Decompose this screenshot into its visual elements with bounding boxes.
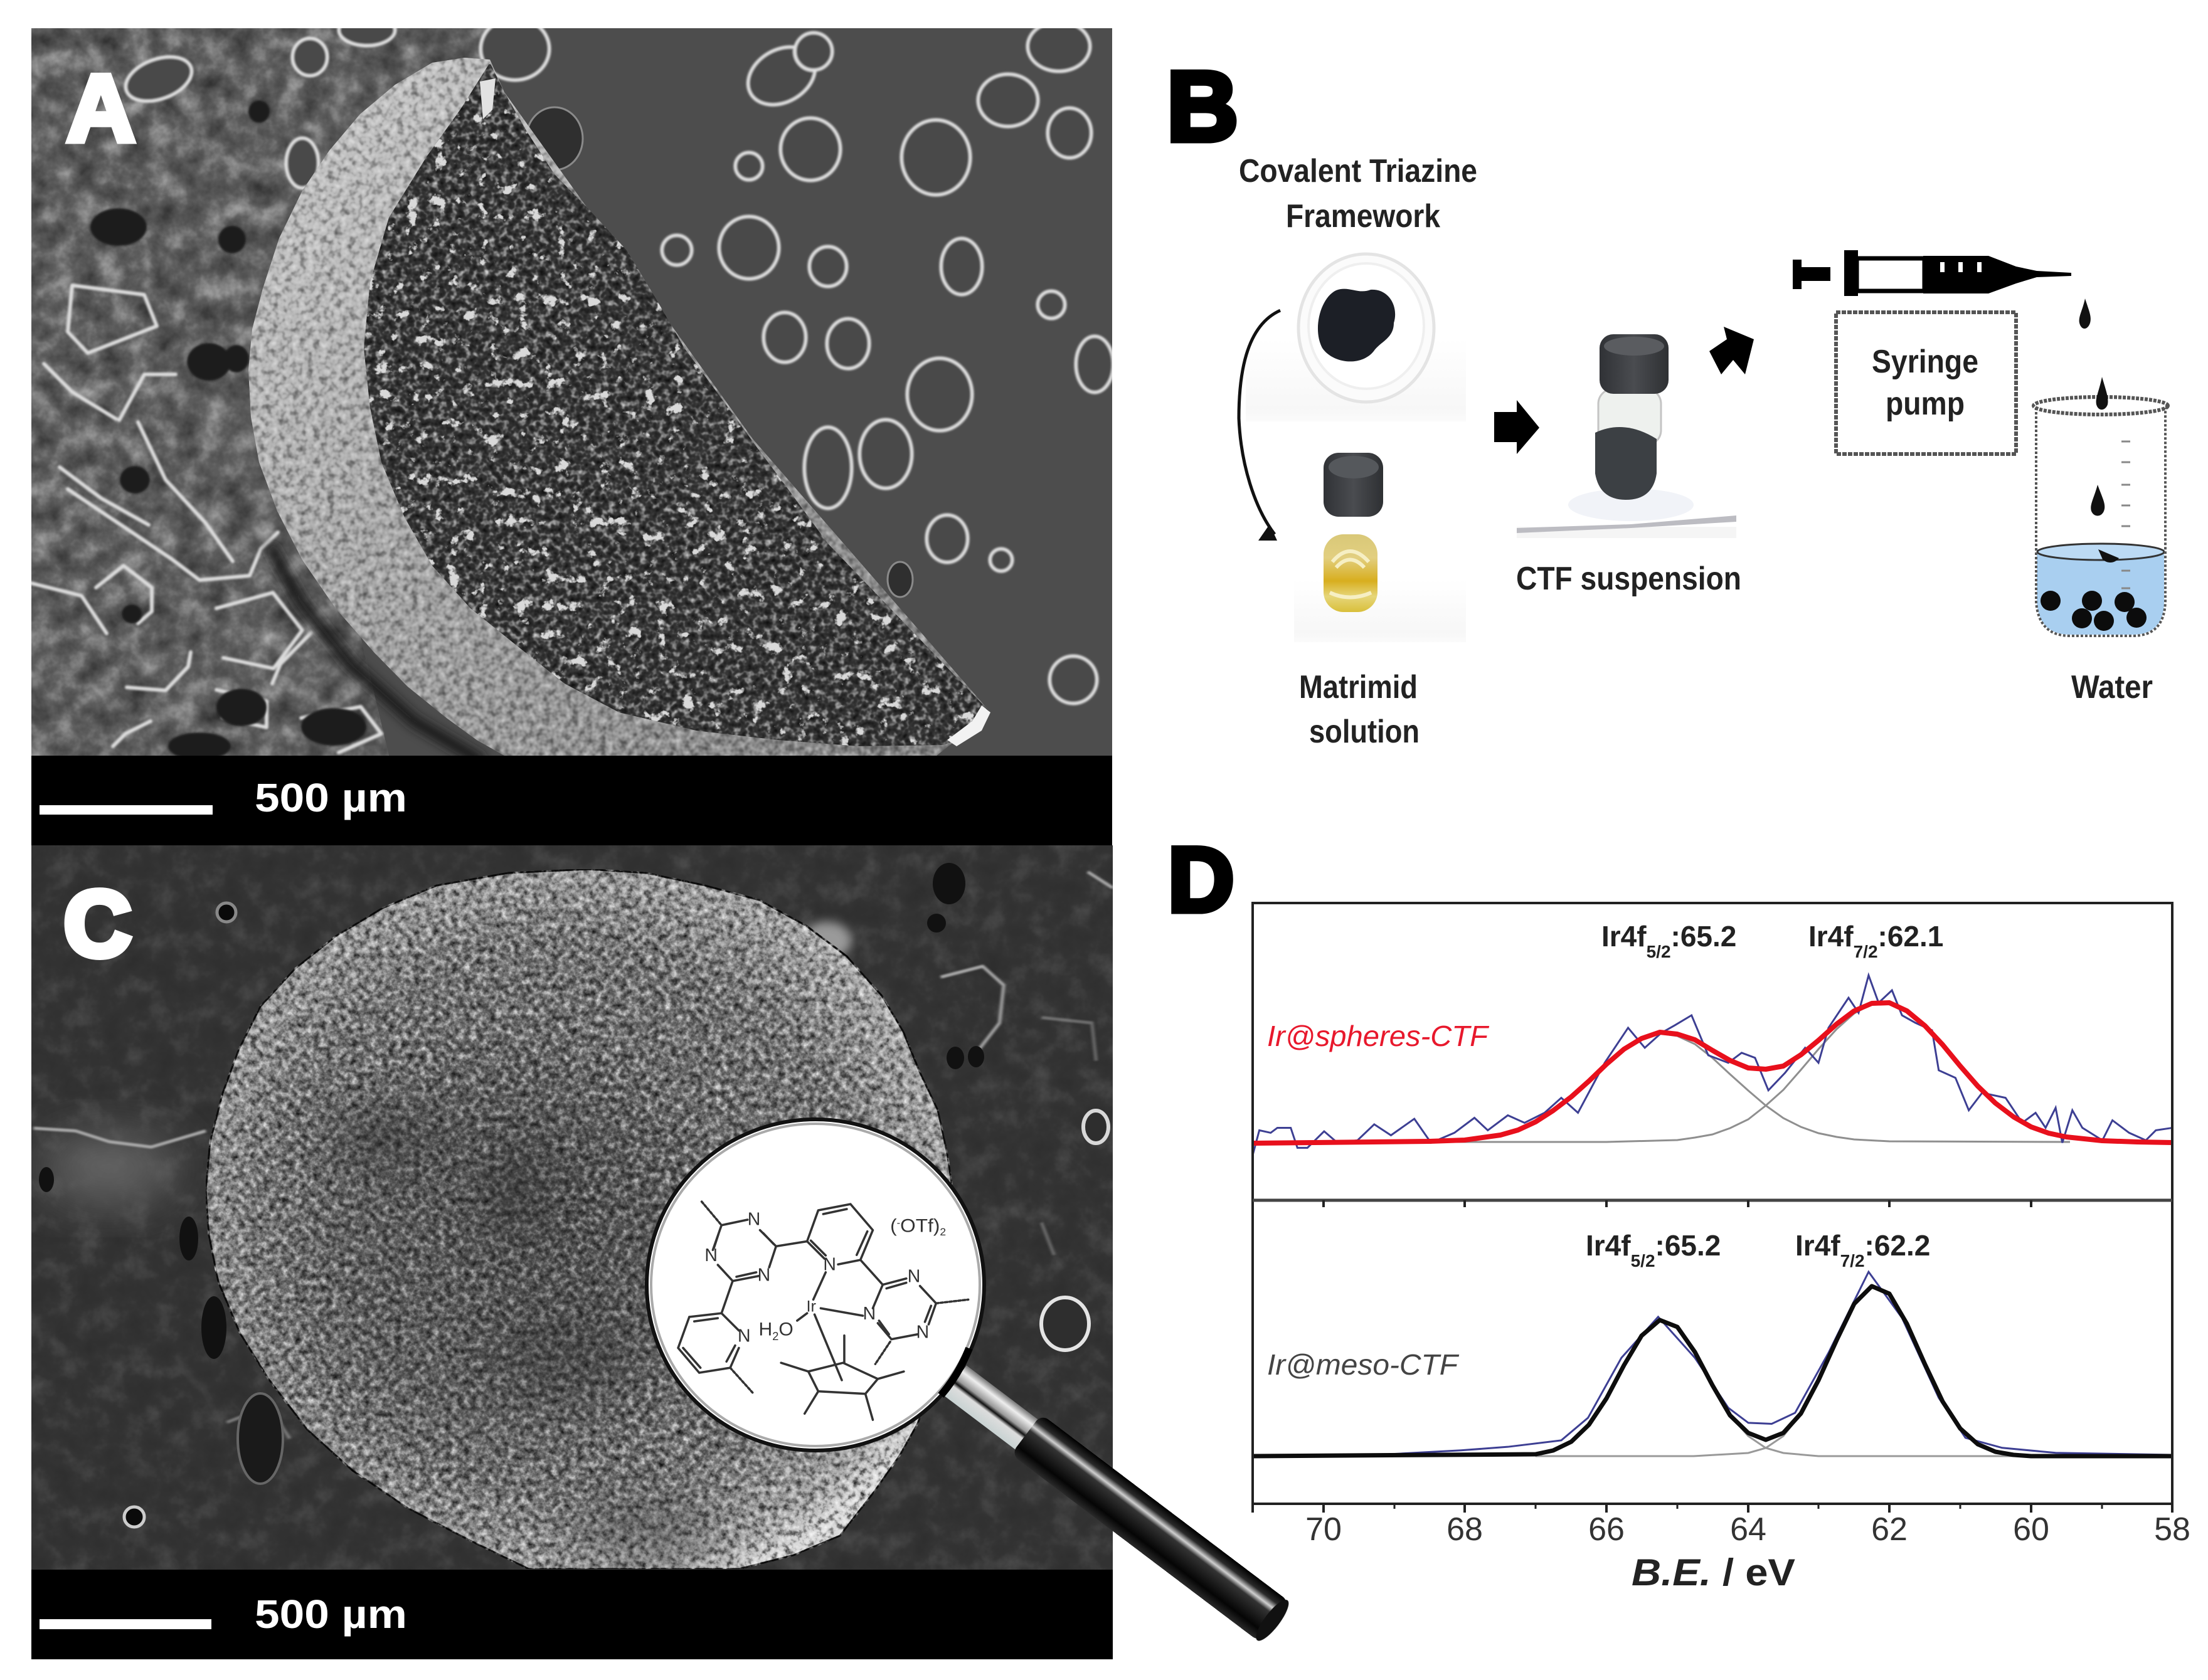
molecule: Ir complex: H <box>759 1319 772 1340</box>
peak labels top: 7/2 <box>1854 942 1878 961</box>
peak labels bottom: 7/2 <box>1840 1251 1865 1271</box>
sphere <box>206 869 960 1569</box>
peak labels bottom: 5/2 <box>1631 1251 1655 1271</box>
falling drops <box>2079 298 2119 563</box>
text: Matrimid solution: Matrimid <box>1299 669 1418 705</box>
syringe pump box: pump <box>1886 386 1965 422</box>
magnifying glass <box>647 1119 1293 1645</box>
text: Matrimid solution <box>1299 669 1420 750</box>
series label red: Ir@spheres-CTF <box>1267 1020 1490 1052</box>
photo: petri dish with CTF powder <box>1246 254 1466 421</box>
peak labels bottom: :65.2 <box>1655 1229 1721 1262</box>
x axis numbers: 58 <box>2154 1511 2190 1548</box>
molecule: Ir complex: N <box>863 1304 876 1324</box>
peak labels bottom: Ir4f <box>1586 1229 1631 1262</box>
syringe pump box <box>1836 312 2016 454</box>
label B: B <box>1167 51 1238 162</box>
photo: CTF suspension vial <box>1517 334 1736 538</box>
peak labels bottom: :62.2 <box>1865 1229 1930 1262</box>
fracture face <box>364 63 990 746</box>
x axis numbers: 64 <box>1730 1511 1766 1548</box>
label A: A <box>66 55 135 162</box>
panel A: SEM of cut sphere <box>31 14 1113 845</box>
label D: D <box>1168 828 1234 931</box>
chart frame and ticks <box>1253 903 2172 1513</box>
molecule: Ir complex: N <box>738 1326 751 1346</box>
molecule: Ir complex: - <box>897 1218 900 1228</box>
label C: C <box>64 872 131 976</box>
molecule: Ir complex: 2 <box>772 1330 778 1343</box>
handle <box>940 1360 1293 1645</box>
lens <box>647 1119 984 1450</box>
peak labels top: Ir4f <box>1808 920 1854 953</box>
arrow to syringe <box>1709 327 1754 374</box>
scale bar A <box>31 756 1112 845</box>
surface craters on substrate <box>119 14 1113 704</box>
scale bar A: 500 µm <box>255 775 407 820</box>
text: Covalent Triazine Framework <box>1239 153 1477 235</box>
series label gray: Ir@meso-CTF <box>1267 1348 1460 1381</box>
x axis numbers: 68 <box>1446 1511 1483 1548</box>
molecule: Ir complex: N <box>758 1265 770 1286</box>
molecule: Ir complex: N <box>916 1323 929 1343</box>
text: Covalent Triazine Framework: Framework <box>1286 198 1440 235</box>
beaker with water and spheres <box>2034 298 2168 636</box>
substrate features <box>34 863 1113 1527</box>
peak labels bottom <box>1586 1229 1930 1271</box>
x axis numbers: 62 <box>1871 1511 1908 1548</box>
x axis numbers: 66 <box>1588 1511 1625 1548</box>
molecule: Ir complex: 2 <box>940 1226 946 1238</box>
molecule: Ir complex: OTf) <box>900 1215 940 1236</box>
x axis numbers <box>1305 1511 2190 1548</box>
peak labels top: :65.2 <box>1671 920 1736 953</box>
x axis numbers: 60 <box>2013 1511 2049 1548</box>
molecule: Ir complex: Ir <box>806 1297 816 1315</box>
peak labels top: Ir4f <box>1601 920 1647 953</box>
peak labels top <box>1601 920 1943 961</box>
icon: syringe <box>1793 250 2071 296</box>
photo: Matrimid vial <box>1294 453 1466 642</box>
x axis title: B.E. / eV <box>1632 1551 1795 1593</box>
scale bar C: 500 µm <box>255 1592 407 1637</box>
peak labels top: 5/2 <box>1647 942 1671 961</box>
scale bar C <box>31 1570 1113 1659</box>
text: Matrimid solution: solution <box>1309 714 1420 750</box>
bottom spectrum: Ir@meso-CTF <box>1253 1272 2172 1456</box>
outer crescent of sphere <box>248 58 990 756</box>
curved arrow <box>1239 310 1280 541</box>
molecule: Ir complex: N <box>823 1255 836 1275</box>
molecule: Ir complex <box>678 1202 969 1420</box>
panel C: SEM of whole sphere <box>31 845 1293 1659</box>
text: Water: Water <box>2071 669 2153 705</box>
x axis numbers: 70 <box>1305 1511 1342 1548</box>
molecule: Ir complex: ( <box>890 1215 896 1236</box>
syringe pump box: Syringe <box>1872 344 1978 380</box>
molecule: Ir complex: N <box>908 1267 920 1287</box>
panel B: fabrication scheme <box>1167 51 2168 750</box>
molecule: Ir complex: O <box>778 1319 794 1340</box>
peak labels top: :62.1 <box>1878 920 1943 953</box>
peak labels bottom: Ir4f <box>1795 1229 1840 1262</box>
text: CTF suspension: CTF suspension <box>1516 561 1741 597</box>
arrow to suspension <box>1494 400 1539 454</box>
panel D: XPS spectra <box>1168 828 2190 1593</box>
molecule: Ir complex: N <box>704 1245 718 1265</box>
text: Covalent Triazine Framework: Covalent Triazine <box>1239 153 1477 189</box>
top spectrum: Ir@spheres-CTF <box>1253 975 2172 1155</box>
molecule: Ir complex: N <box>748 1210 760 1230</box>
